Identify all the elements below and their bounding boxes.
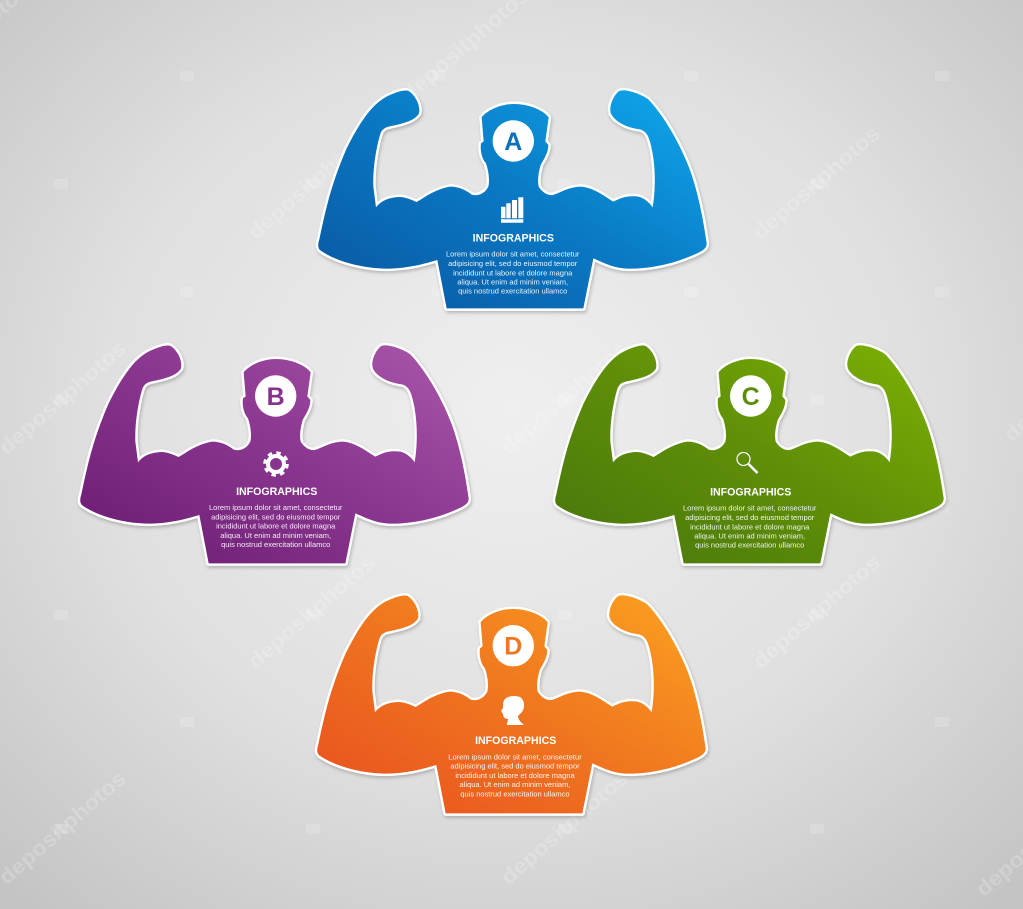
watermarks: depositphotos — [244, 122, 380, 244]
text block: A: aliqua. Ut enim ad minim veniam, — [457, 277, 568, 286]
text block: C — [683, 504, 817, 550]
text block: A — [446, 250, 580, 296]
badge: letter D — [493, 625, 534, 666]
text block: C: Lorem ipsum dolor sit amet, consectetur — [683, 504, 817, 513]
text block: B: quis nostrud exercitation ullamco — [221, 540, 330, 549]
watermarks: depositphotos — [497, 767, 633, 889]
watermarks: depositphotos — [244, 551, 380, 673]
text block: B: Lorem ipsum dolor sit amet, consectetur — [209, 503, 343, 512]
text block: B: incididunt ut labore et dolore magna — [216, 522, 336, 531]
heading: C: INFOGRAPHICS — [710, 486, 791, 498]
figure: B silhouette — [80, 345, 469, 563]
text block: D: Lorem ipsum dolor sit amet, consectetur — [448, 752, 582, 761]
badge: letter D: D — [504, 633, 522, 661]
figure: C silhouette — [555, 345, 944, 563]
icon: bar chart — [501, 197, 523, 223]
figure: D silhouette — [317, 595, 706, 813]
watermarks: depositphotos — [749, 551, 885, 673]
text block: D: adipisicing elit, sed do eiusmod tempor — [450, 762, 580, 771]
text block: C: aliqua. Ut enim ad minim veniam, — [694, 532, 805, 540]
text block: A: Lorem ipsum dolor sit amet, consectetur — [446, 250, 580, 259]
panel: D — [317, 595, 706, 813]
text block: D — [448, 752, 582, 798]
text block: A: incididunt ut labore et dolore magna — [453, 268, 573, 277]
text block: B — [209, 503, 343, 549]
panel: C — [555, 345, 944, 563]
badge: letter A: A — [504, 128, 522, 156]
text block: B: aliqua. Ut enim ad minim veniam, — [220, 531, 331, 540]
icon: head profile — [501, 696, 524, 725]
text block: B: adipisicing elit, sed do eiusmod tempor — [211, 512, 341, 521]
heading: D: INFOGRAPHICS — [475, 735, 556, 747]
text block: A: adipisicing elit, sed do eiusmod tempor — [448, 259, 578, 268]
watermark camera icons — [54, 71, 949, 834]
badge: letter C — [730, 375, 771, 417]
heading: A: INFOGRAPHICS — [473, 232, 554, 244]
text block: C: adipisicing elit, sed do eiusmod tempor — [685, 513, 815, 522]
watermarks: depositphotos — [749, 122, 885, 244]
panel: A — [318, 90, 707, 308]
text block: A: quis nostrud exercitation ullamco — [458, 287, 567, 296]
badge: letter B: B — [267, 383, 285, 411]
text block: C: quis nostrud exercitation ullamco — [695, 541, 804, 550]
badge: letter B — [255, 375, 296, 417]
text block: D: quis nostrud exercitation ullamco — [460, 789, 570, 798]
icon: gear — [265, 453, 287, 475]
panel: B — [80, 345, 469, 563]
text block: D: aliqua. Ut enim ad minim veniam, — [460, 780, 570, 789]
text block: D: incididunt ut labore et dolore magna — [455, 771, 575, 780]
heading: B: INFOGRAPHICS — [236, 486, 317, 498]
watermarks: depositphotos — [497, 337, 633, 459]
figure: A silhouette — [318, 90, 707, 308]
icon: magnifier — [737, 452, 758, 473]
badge: letter A — [493, 120, 534, 162]
badge: letter C: C — [742, 383, 760, 411]
text block: C: incididunt ut labore et dolore magna — [690, 522, 810, 531]
